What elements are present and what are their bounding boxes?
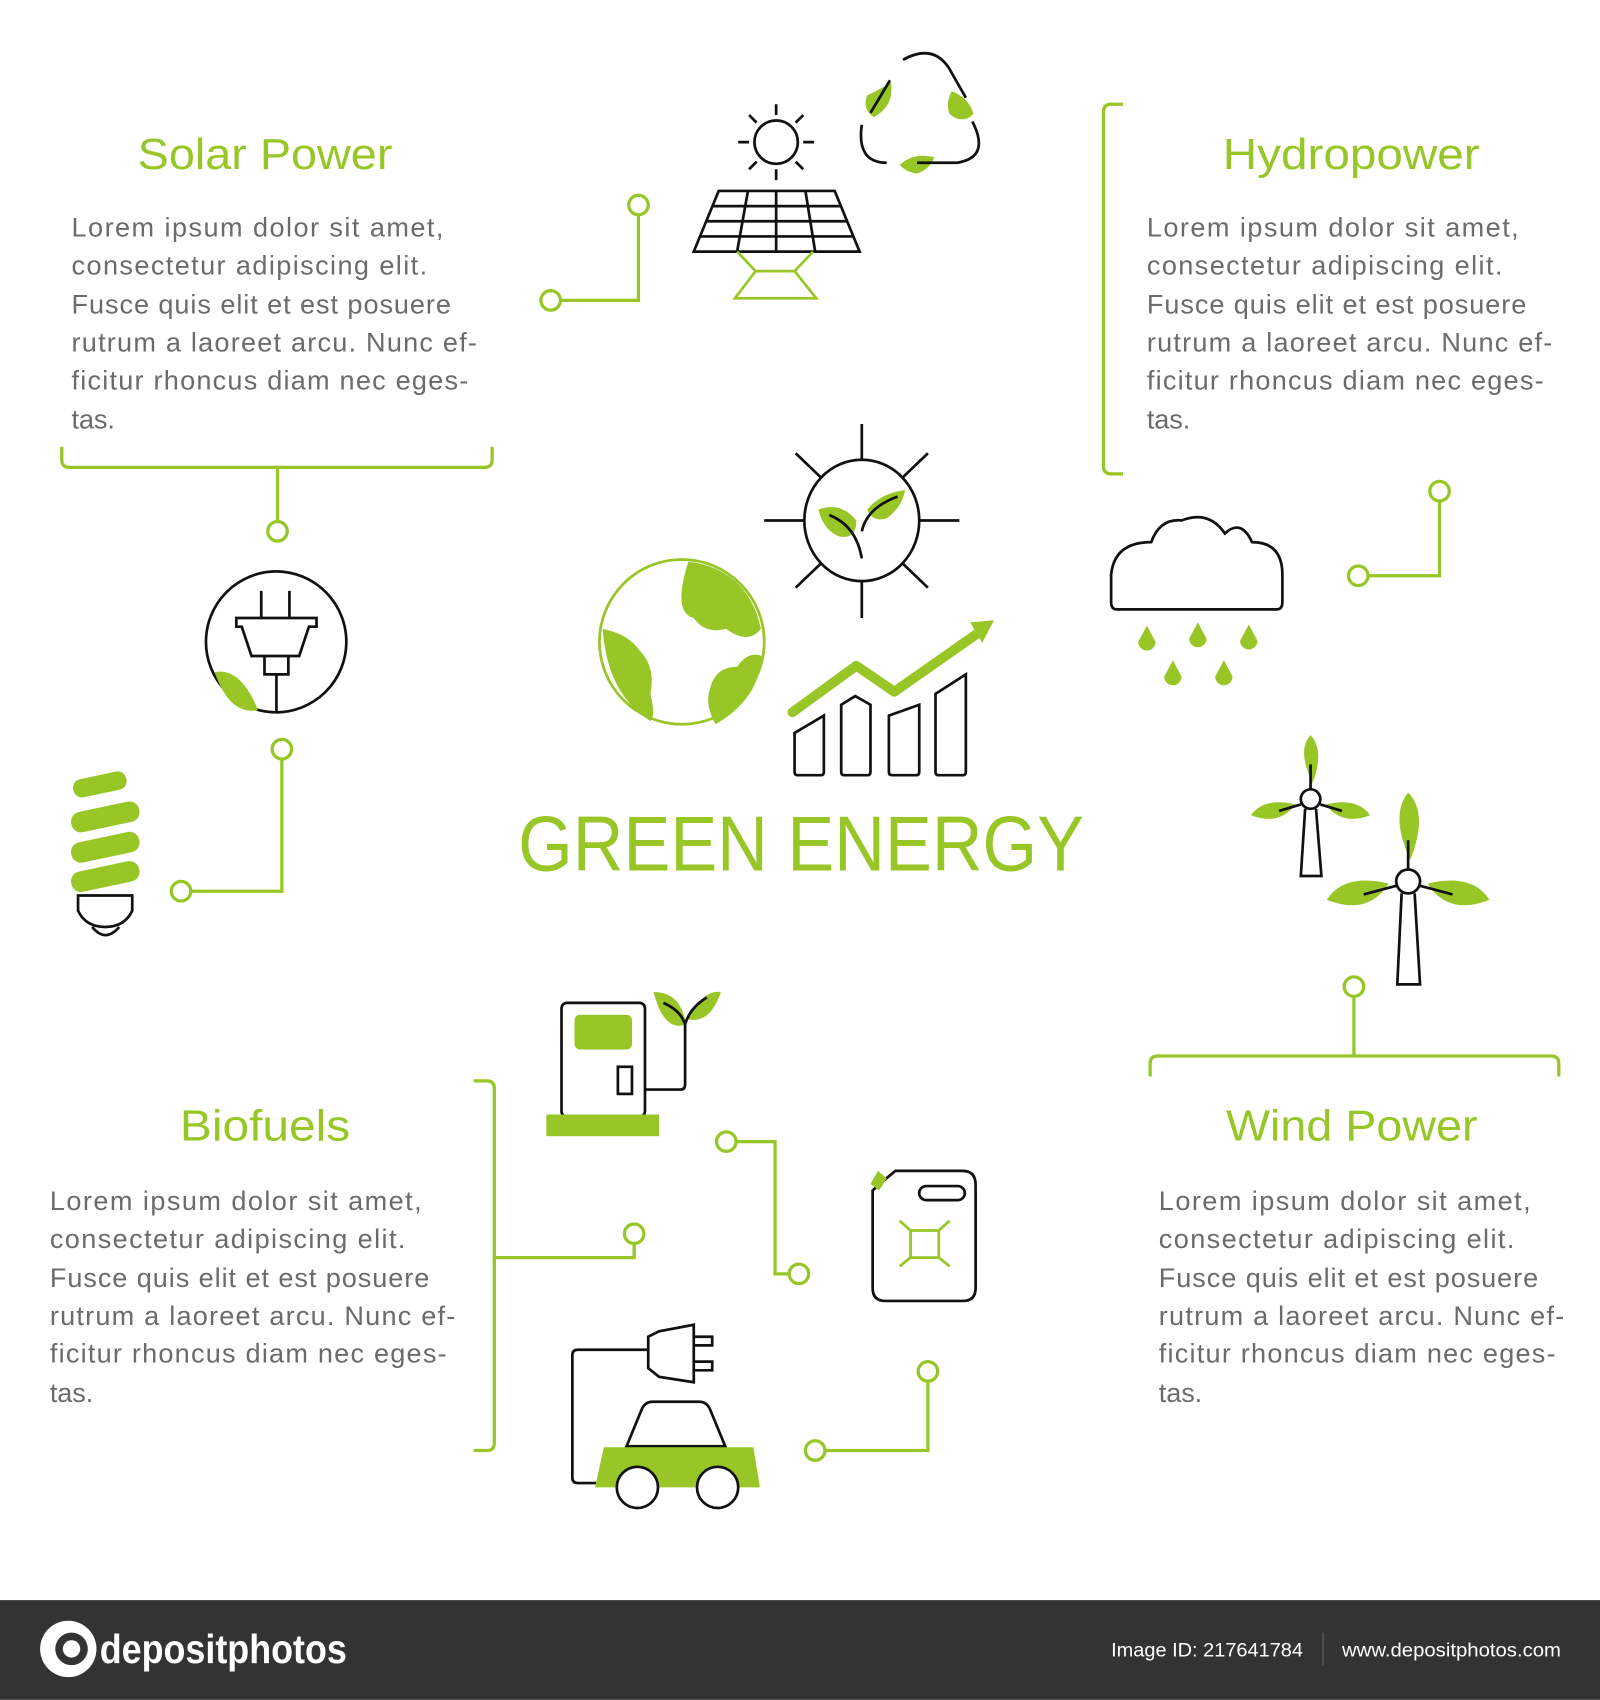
footer bar xyxy=(0,1600,1600,1700)
text block: Wind Power body: rutrum a laoreet arcu. Nunc ef- xyxy=(1159,1300,1564,1331)
text block: Solar Power body: Lorem ipsum dolor sit amet, xyxy=(72,211,443,242)
icon: jerrycan xyxy=(870,1171,976,1301)
icon: recycle leaves xyxy=(861,53,979,174)
connector: hydro xyxy=(1349,481,1449,586)
title: Wind Power: Wind Power xyxy=(1226,1103,1478,1151)
icon: rain cloud xyxy=(1111,517,1282,685)
text block: Hydropower body: Lorem ipsum dolor sit amet, xyxy=(1147,211,1519,242)
text block: Hydropower body: Fusce quis elit et est posuere xyxy=(1147,288,1526,319)
text block: Solar Power body: ficitur rhoncus diam nec eges- xyxy=(72,364,468,395)
text block: Wind Power body xyxy=(1159,1185,1564,1408)
connector: fuel pump xyxy=(717,1132,809,1284)
title: Hydropower: Hydropower xyxy=(1223,131,1480,179)
footer image id xyxy=(1111,1633,1561,1665)
text block: Solar Power body: consectetur adipiscing elit. xyxy=(72,249,427,280)
text block: Biofuels body: ficitur rhoncus diam nec eges- xyxy=(50,1338,447,1369)
text block: Solar Power body: Fusce quis elit et est posuere xyxy=(72,288,451,319)
text block: Wind Power body: Lorem ipsum dolor sit amet, xyxy=(1159,1185,1531,1216)
footer image id: www.depositphotos.com xyxy=(1341,1640,1561,1662)
text block: Hydropower body: tas. xyxy=(1147,403,1190,434)
text block: Hydropower body xyxy=(1147,211,1552,434)
icon: sun with sprout xyxy=(764,424,959,618)
icon: wind turbines xyxy=(1251,735,1489,984)
bracket: solar xyxy=(62,447,492,541)
text block: Biofuels body: consectetur adipiscing elit. xyxy=(50,1223,405,1254)
footer logo: depositphotos xyxy=(100,1626,347,1672)
main title: GREEN ENERGY xyxy=(518,800,1084,888)
text block: Wind Power body: ficitur rhoncus diam nec eges- xyxy=(1159,1338,1556,1369)
connector: car xyxy=(805,1362,938,1460)
title: Solar Power: Solar Power xyxy=(138,131,392,179)
text block: Hydropower body: consectetur adipiscing elit. xyxy=(1147,249,1502,280)
bracket: hydro xyxy=(1104,104,1123,474)
footer image id: Image ID: 217641784 xyxy=(1111,1640,1303,1662)
text block: Hydropower body: ficitur rhoncus diam nec eges- xyxy=(1147,364,1544,395)
bracket: biofuels xyxy=(474,1081,644,1451)
text block: Solar Power body xyxy=(72,211,477,434)
text block: Biofuels body: Lorem ipsum dolor sit amet, xyxy=(50,1185,422,1216)
text block: Biofuels body: Fusce quis elit et est posuere xyxy=(50,1262,429,1293)
icon: energy saving bulb xyxy=(69,770,141,935)
icon: solar panel with sun xyxy=(694,104,860,298)
text block: Solar Power body: tas. xyxy=(72,403,115,434)
text block: Wind Power body: tas. xyxy=(1159,1377,1202,1408)
icon: electric car xyxy=(572,1325,760,1508)
footer logo xyxy=(40,1621,347,1677)
icon: globe xyxy=(599,559,764,724)
icon: biofuel pump xyxy=(546,992,721,1136)
text block: Biofuels body: rutrum a laoreet arcu. Nunc ef- xyxy=(50,1300,455,1331)
text block: Wind Power body: Fusce quis elit et est posuere xyxy=(1159,1262,1538,1293)
bracket: wind xyxy=(1150,977,1559,1077)
connector: bulb xyxy=(171,739,292,901)
text block: Biofuels body: tas. xyxy=(50,1377,93,1408)
text block: Hydropower body: rutrum a laoreet arcu. Nunc ef- xyxy=(1147,326,1552,357)
icon: plug in circle xyxy=(206,571,346,712)
text block: Solar Power body: rutrum a laoreet arcu. Nunc ef- xyxy=(72,326,477,357)
text block: Wind Power body: consectetur adipiscing elit. xyxy=(1159,1223,1514,1254)
title: Biofuels: Biofuels xyxy=(180,1103,350,1151)
icon: growth chart xyxy=(792,620,994,775)
connector: solar panel xyxy=(541,195,648,310)
text block: Biofuels body xyxy=(50,1185,455,1408)
